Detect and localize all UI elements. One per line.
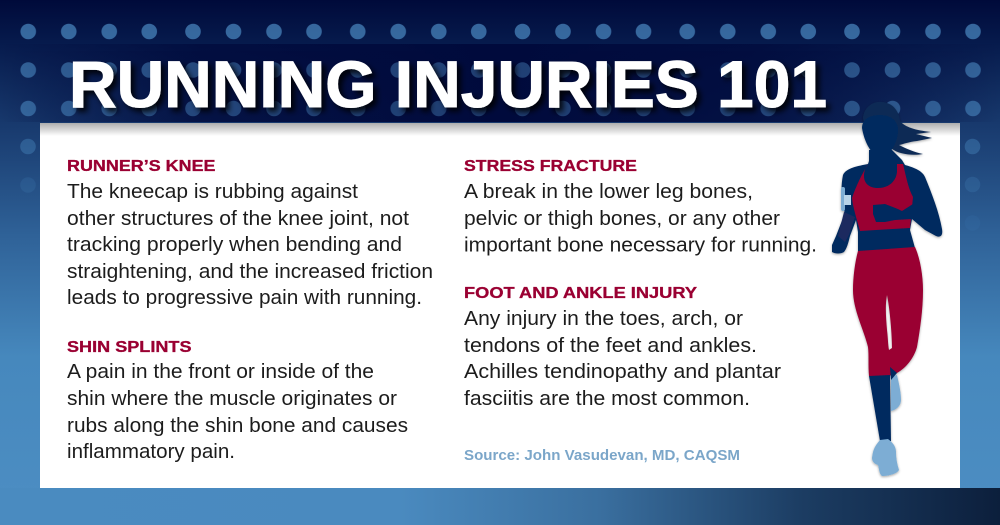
fist and forearm — [873, 204, 913, 222]
section: runner's knee — [67, 158, 433, 309]
section: shin splints: shin where the muscle originates or — [67, 387, 397, 410]
section: runner's knee: RUNNER’S KNEE — [67, 158, 216, 175]
source credit: Source: John Vasudevan, MD, CAQSM — [464, 447, 740, 464]
lower leg — [869, 375, 891, 441]
section: shin splints: SHIN SPLINTS — [67, 339, 192, 356]
section: runner's knee: leads to progressive pain with running. — [67, 286, 422, 309]
section: foot and ankle injury: Achilles tendinopathy and plantar — [464, 360, 781, 383]
section: foot and ankle injury — [464, 285, 781, 410]
section: runner's knee: other structures of the knee joint, not — [67, 207, 409, 230]
section: shin splints: A pain in the front or inside of the — [67, 360, 374, 383]
runner silhouette — [832, 102, 942, 476]
section: shin splints: rubs along the shin bone and causes — [67, 414, 408, 437]
section: foot and ankle injury: tendons of the feet and ankles. — [464, 334, 757, 357]
head — [862, 115, 898, 156]
section: stress fracture — [464, 158, 817, 256]
section: shin splints — [67, 339, 408, 463]
dot pattern — [0, 12, 1000, 231]
section: foot and ankle injury: Any injury in the toes, arch, or — [464, 307, 743, 330]
back foot — [891, 375, 901, 411]
white content panel — [40, 123, 960, 488]
footer strip — [0, 488, 1000, 525]
body and arms — [832, 150, 942, 254]
section: stress fracture: important bone necessary for running. — [464, 234, 817, 256]
section: shin splints: inflammatory pain. — [67, 440, 235, 463]
rear forearm — [838, 212, 855, 242]
section: runner's knee: tracking properly when bending and — [67, 233, 402, 256]
section: runner's knee: The kneecap is rubbing against — [67, 180, 358, 203]
title band — [0, 44, 1000, 122]
front shoe — [872, 439, 899, 476]
knee fold — [890, 367, 897, 380]
section: runner's knee: straightening, and the increased friction — [67, 260, 433, 283]
section: stress fracture: pelvic or thigh bones, or any other — [464, 207, 780, 230]
hair — [863, 102, 932, 155]
section: foot and ankle injury: FOOT AND ANKLE INJURY — [464, 285, 698, 302]
section: foot and ankle injury: fasciitis are the most common. — [464, 387, 750, 410]
tank top — [852, 164, 913, 231]
leggings — [853, 247, 923, 376]
section: stress fracture: STRESS FRACTURE — [464, 158, 637, 175]
title: RUNNING INJURIES 101 — [69, 47, 827, 121]
armband — [841, 187, 851, 211]
section: stress fracture: A break in the lower leg bones, — [464, 180, 753, 203]
